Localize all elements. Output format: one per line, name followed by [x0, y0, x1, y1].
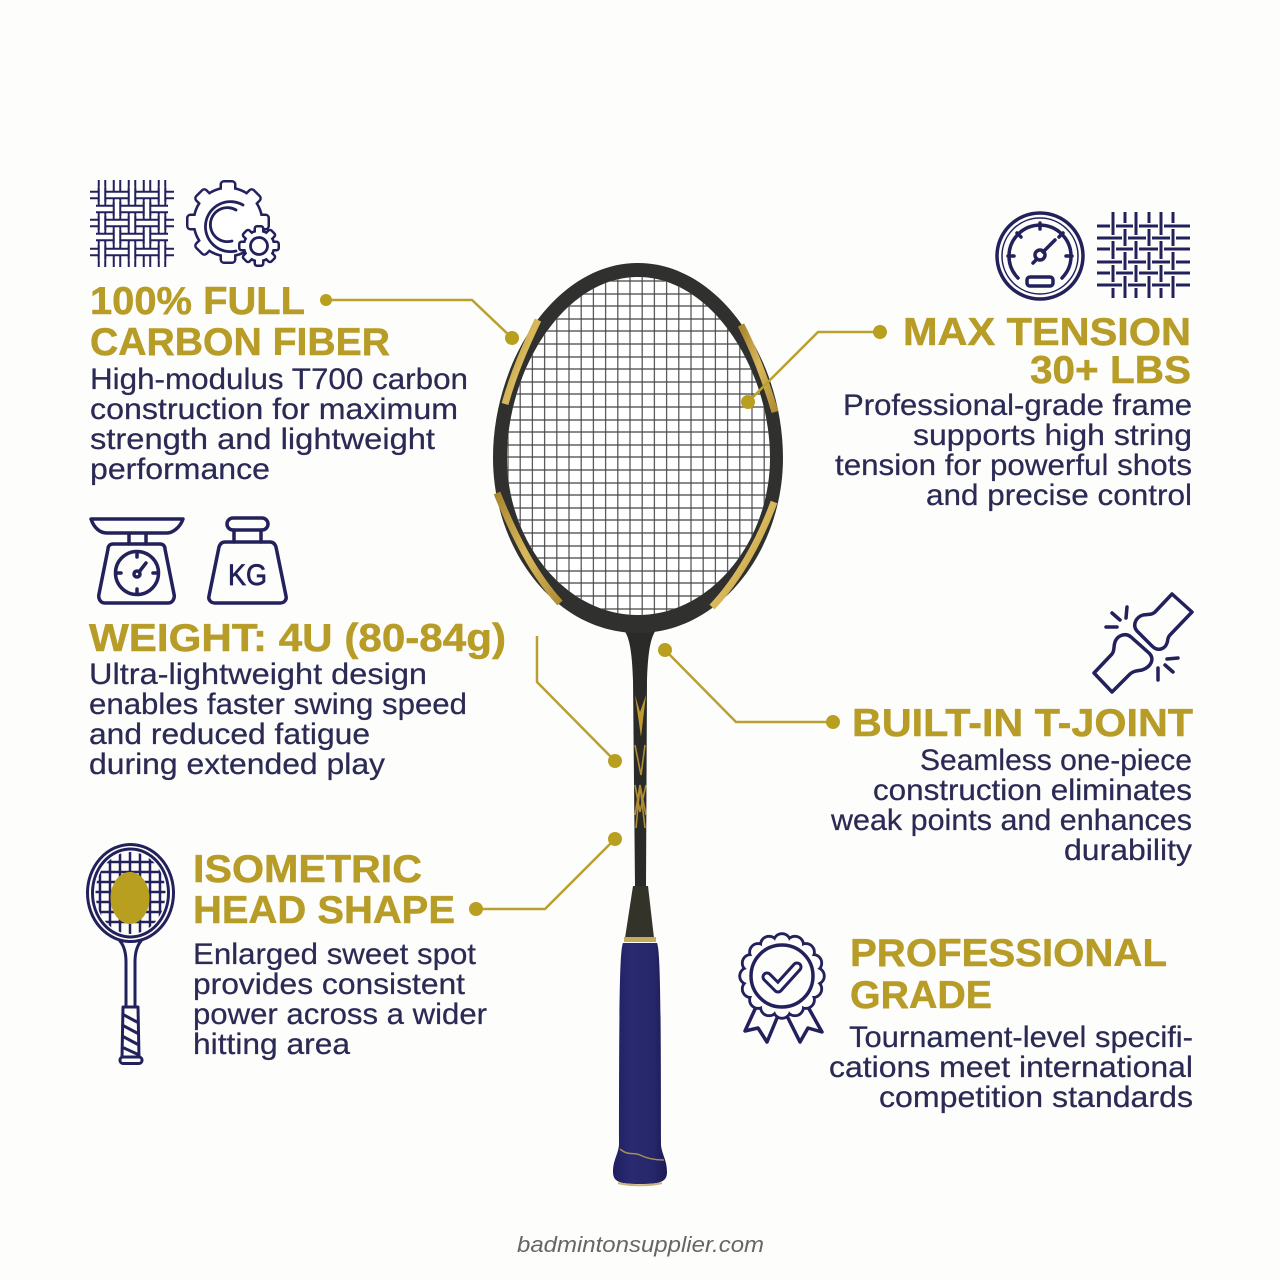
icon: carbon weave — [90, 180, 174, 267]
heading: professional grade: PROFESSIONAL — [850, 932, 1167, 975]
text: t-joint description: Seamless one-piece — [920, 744, 1192, 777]
leader: carbon fiber — [320, 294, 519, 345]
heading: carbon fiber: CARBON FIBER — [90, 321, 390, 364]
heading: weight: WEIGHT: 4U (80-84g) — [89, 617, 506, 660]
text: weight description: during extended play — [89, 748, 385, 781]
text: t-joint description: construction eliminates — [873, 774, 1192, 807]
heading: t-joint: BUILT-IN T-JOINT — [852, 702, 1193, 745]
heading: max tension: 30+ LBS — [1030, 349, 1191, 392]
heading: carbon fiber — [90, 280, 390, 364]
text: isometric description: Enlarged sweet spot — [193, 938, 476, 971]
racket frame — [493, 263, 783, 633]
text: max tension description: supports high string — [913, 419, 1192, 452]
racket strings — [500, 270, 780, 620]
icon: tension gauge — [997, 213, 1083, 299]
text: max tension description — [835, 389, 1192, 512]
text: carbon fiber description — [90, 363, 468, 486]
heading: isometric — [193, 848, 455, 932]
text: carbon fiber description: strength and lightweight — [90, 423, 435, 456]
icon: kg weight: KG — [228, 559, 267, 592]
leader: t-joint — [658, 643, 840, 729]
heading: professional grade — [850, 932, 1167, 1017]
text: isometric description: provides consistent — [193, 968, 465, 1001]
text: weight description: enables faster swing speed — [89, 688, 467, 721]
footer: website: badmintonsupplier.com — [517, 1232, 764, 1257]
text: professional grade description: competition standards — [879, 1081, 1193, 1114]
heading: carbon fiber: 100% FULL — [90, 280, 305, 323]
leader: max tension — [741, 325, 887, 409]
text: carbon fiber description: construction for maximum — [90, 393, 458, 426]
heading: isometric: ISOMETRIC — [193, 848, 422, 891]
text: max tension description: tension for powerful shots — [835, 449, 1192, 482]
text: professional grade description — [829, 1021, 1193, 1114]
leader: isometric — [469, 832, 622, 916]
gold frame accents — [497, 320, 775, 607]
racket shaft — [622, 628, 658, 942]
text: isometric description: hitting area — [193, 1028, 351, 1061]
text: professional grade description: Tournament-level specifi- — [849, 1021, 1193, 1054]
racket — [493, 263, 783, 1185]
text: t-joint description: durability — [1064, 834, 1192, 867]
icon: string weave — [1097, 212, 1190, 298]
text: carbon fiber description: High-modulus T700 carbon — [90, 363, 468, 396]
heading: max tension: MAX TENSION — [903, 311, 1191, 354]
text: carbon fiber description: performance — [90, 453, 270, 486]
racket grip — [613, 943, 667, 1185]
heading: max tension — [903, 311, 1191, 392]
text: weight description — [89, 658, 467, 781]
text: max tension description: and precise control — [926, 479, 1192, 512]
icon: racket sweet spot — [88, 844, 174, 1064]
icon: kg weight — [209, 518, 286, 603]
text: isometric description: power across a wider — [193, 998, 487, 1031]
icon: kitchen scale — [91, 519, 183, 603]
text: weight description: Ultra-lightweight design — [89, 658, 427, 691]
heading: professional grade: GRADE — [850, 974, 992, 1017]
text: t-joint description: weak points and enhances — [830, 804, 1192, 837]
text: professional grade description: cations meet international — [829, 1051, 1193, 1084]
icon: quality badge — [741, 935, 823, 1042]
icon: gears — [188, 182, 278, 264]
heading: isometric: HEAD SHAPE — [193, 889, 455, 932]
icon: t-joint — [1094, 594, 1192, 692]
text: t-joint description — [830, 744, 1192, 867]
text: isometric description — [193, 938, 487, 1061]
leader: weight — [537, 636, 622, 768]
text: max tension description: Professional-grade frame — [843, 389, 1192, 422]
text: weight description: and reduced fatigue — [89, 718, 370, 751]
